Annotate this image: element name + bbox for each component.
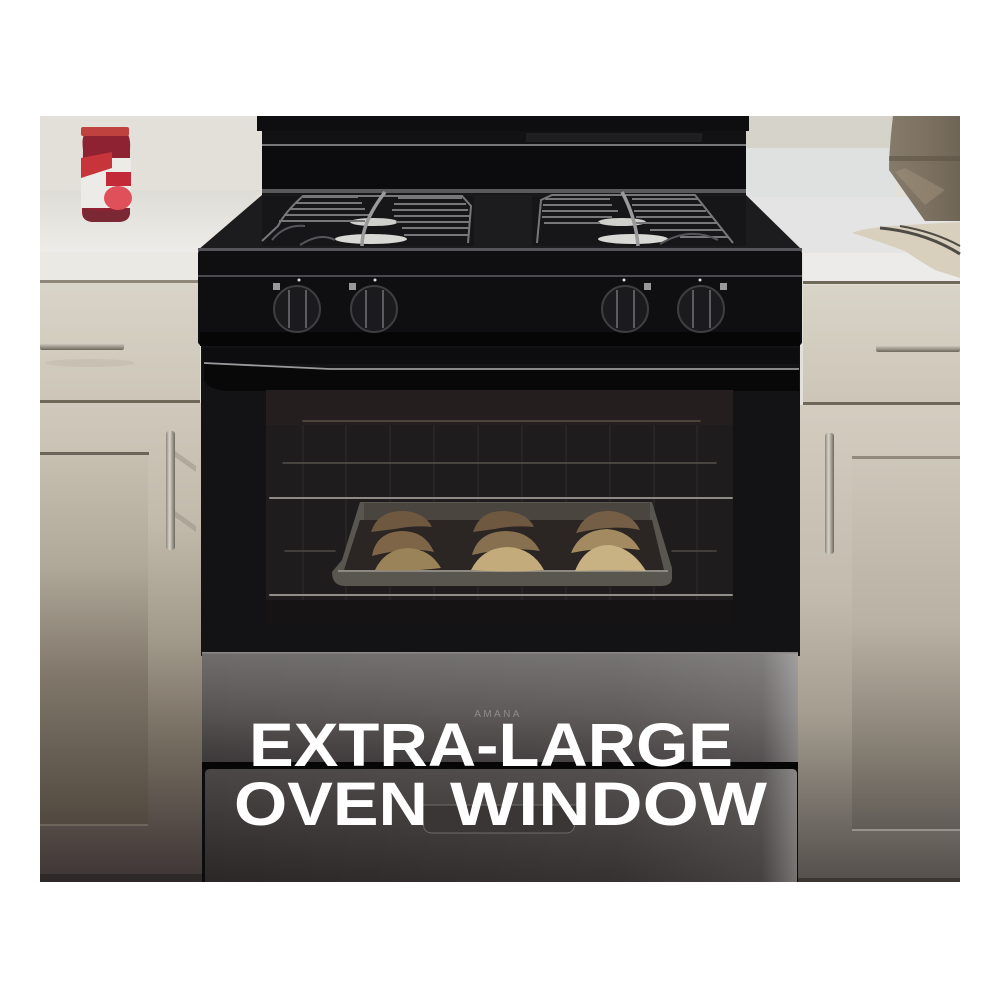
left door handle: [166, 431, 196, 550]
right burner grate: [532, 192, 746, 246]
oven door: [201, 346, 800, 656]
right door handle: [825, 433, 834, 554]
knob 3: [602, 278, 651, 332]
baking tray: [332, 502, 672, 586]
jam jar: [81, 127, 132, 222]
right counter: [746, 197, 960, 284]
cooktop: [198, 195, 802, 250]
right cabinet: [798, 285, 960, 882]
oven window: [266, 390, 733, 625]
knob 4: [678, 278, 727, 332]
folded towel: [852, 222, 960, 278]
oven racks: [270, 421, 732, 595]
storage drawer: [205, 769, 797, 882]
croissants middle column: [471, 511, 544, 572]
title line 1: EXTRA-LARGE: [249, 711, 733, 779]
croissants right column: [571, 511, 646, 571]
clay pot: [889, 116, 960, 221]
title line 2: window: WINDOW: [450, 770, 767, 838]
knob 2: [349, 278, 397, 332]
range body backing: [202, 345, 798, 882]
gap between panel and drawer: [202, 762, 798, 769]
croissants left column: [371, 511, 441, 571]
backguard: [257, 116, 749, 205]
stainless lower panel: [202, 652, 798, 762]
knob 1: [273, 278, 320, 332]
right drawer handle: [876, 345, 960, 352]
left burner grate: [262, 192, 474, 246]
range: [198, 116, 802, 882]
left drawer handle: [40, 343, 124, 350]
brand name: AMANA: [474, 709, 522, 720]
door handle: [204, 364, 799, 391]
photo background: wall: [40, 116, 960, 882]
title line 2: oven: OVEN: [234, 770, 428, 838]
title: [234, 711, 767, 838]
left cabinet: [40, 283, 203, 882]
control panel: [198, 248, 802, 346]
left counter: [40, 190, 262, 283]
